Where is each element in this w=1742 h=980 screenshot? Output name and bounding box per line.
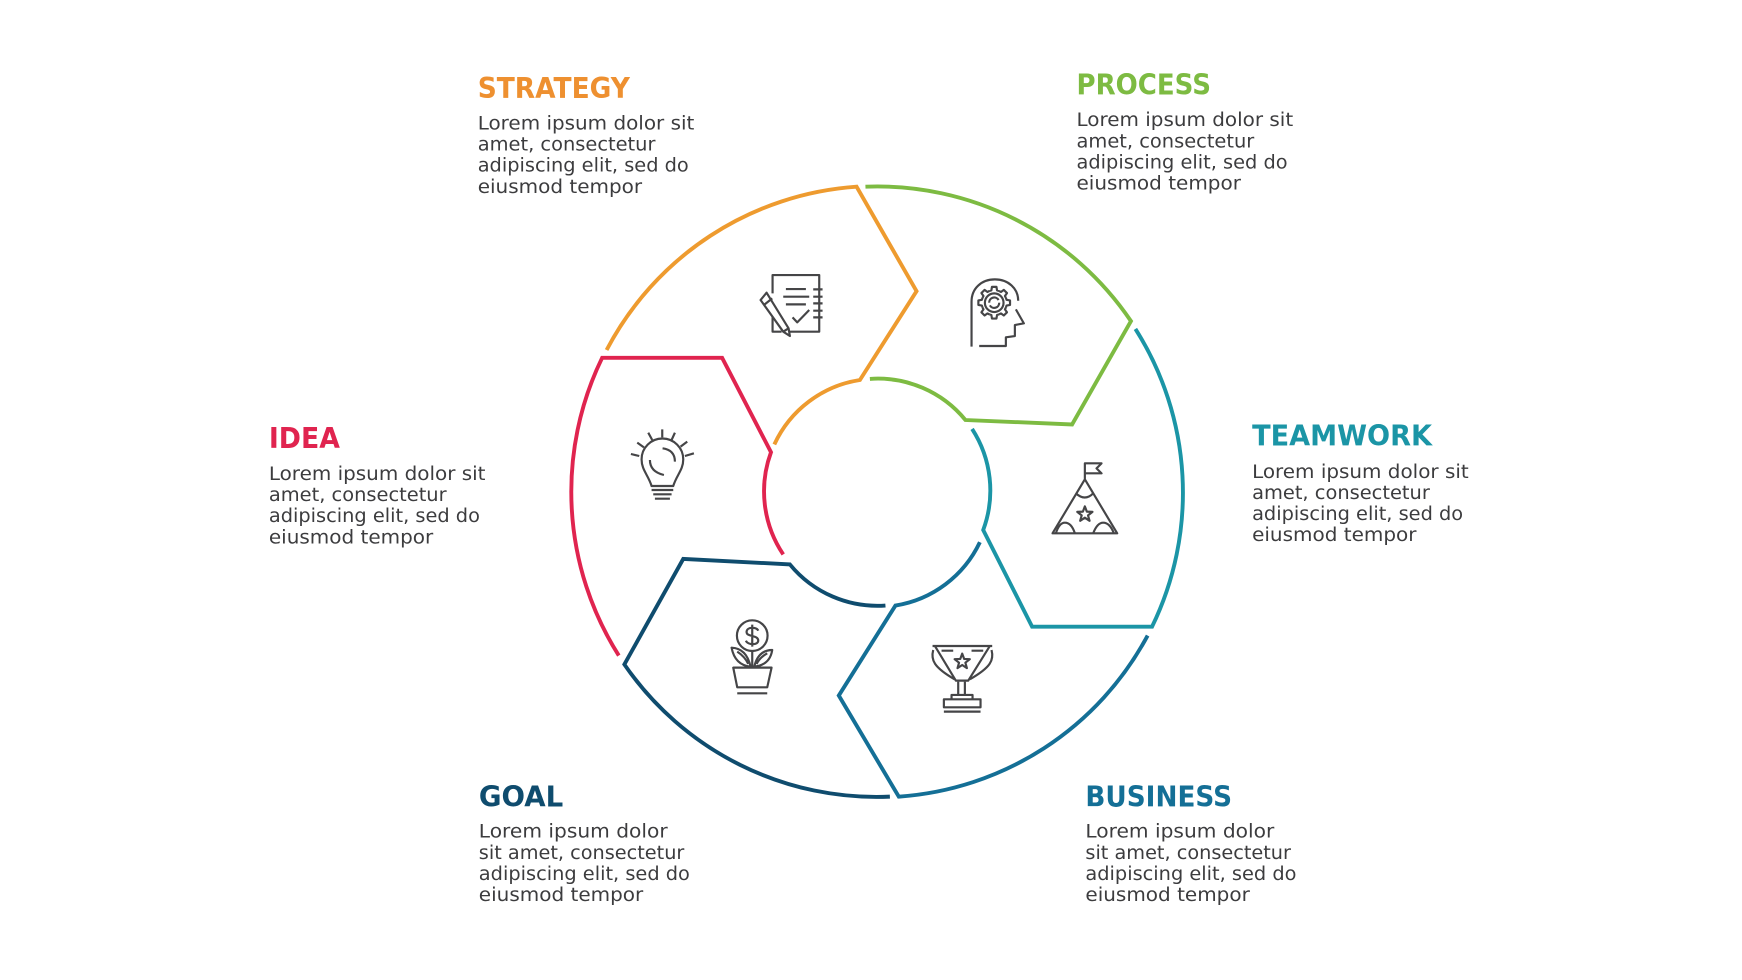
description: process: amet, consectetur [1077, 131, 1255, 152]
heading: goal: GOAL [479, 780, 563, 814]
heading: process: PROCESS [1077, 67, 1211, 101]
icon: light bulb [631, 429, 694, 499]
icon: trophy [932, 646, 992, 712]
description: business: Lorem ipsum dolor [1085, 822, 1275, 843]
description: teamwork: Lorem ipsum dolor sit [1252, 462, 1469, 483]
description: idea: eiusmod tempor [269, 527, 434, 548]
description: teamwork [1252, 462, 1469, 546]
description: process [1077, 110, 1293, 194]
icon: mountain with flag [1053, 463, 1117, 533]
description: strategy [478, 113, 694, 198]
description: goal: eiusmod tempor [479, 885, 644, 906]
heading: idea: IDEA [269, 421, 341, 455]
description: idea: amet, consectetur [269, 485, 447, 506]
text block: idea [269, 421, 485, 548]
description: strategy: amet, consectetur [478, 135, 656, 156]
description: goal: Lorem ipsum dolor [479, 822, 668, 843]
segment outline: idea [571, 358, 783, 656]
description: strategy: eiusmod tempor [478, 177, 642, 198]
description: business: eiusmod tempor [1085, 885, 1250, 906]
segment outline: business [839, 542, 1148, 797]
text block: process [1077, 67, 1293, 194]
text block: business [1085, 780, 1297, 906]
description: business [1085, 822, 1297, 906]
description: strategy: adipiscing elit, sed do [478, 156, 689, 177]
segment outline: goal [624, 559, 890, 797]
description: goal [479, 822, 690, 906]
text block: strategy [478, 71, 694, 198]
description: goal: adipiscing elit, sed do [479, 864, 690, 885]
heading: business: BUSINESS [1085, 780, 1232, 814]
icon: money plant [732, 620, 772, 693]
icon: notebook and pen [761, 275, 823, 336]
description: business: sit amet, consectetur [1085, 843, 1291, 864]
description: teamwork: amet, consectetur [1252, 483, 1430, 504]
icon: head with gear [972, 279, 1024, 347]
segment outline: process [865, 186, 1131, 424]
description: idea: adipiscing elit, sed do [269, 506, 480, 527]
description: business: adipiscing elit, sed do [1085, 864, 1297, 885]
description: goal: sit amet, consectetur [479, 843, 685, 864]
text block: teamwork [1252, 419, 1469, 546]
description: idea [269, 464, 485, 548]
description: idea: Lorem ipsum dolor sit [269, 464, 485, 485]
description: teamwork: adipiscing elit, sed do [1252, 504, 1463, 525]
description: strategy: Lorem ipsum dolor sit [478, 113, 694, 134]
segment outline: strategy [607, 187, 917, 444]
segment outline: teamwork [972, 329, 1183, 627]
text block: goal [479, 780, 690, 906]
description: process: eiusmod tempor [1077, 173, 1241, 194]
heading: strategy: STRATEGY [478, 71, 631, 105]
heading: teamwork: TEAMWORK [1252, 419, 1434, 453]
description: teamwork: eiusmod tempor [1252, 525, 1417, 546]
description: process: Lorem ipsum dolor sit [1077, 110, 1293, 131]
description: process: adipiscing elit, sed do [1077, 152, 1288, 173]
